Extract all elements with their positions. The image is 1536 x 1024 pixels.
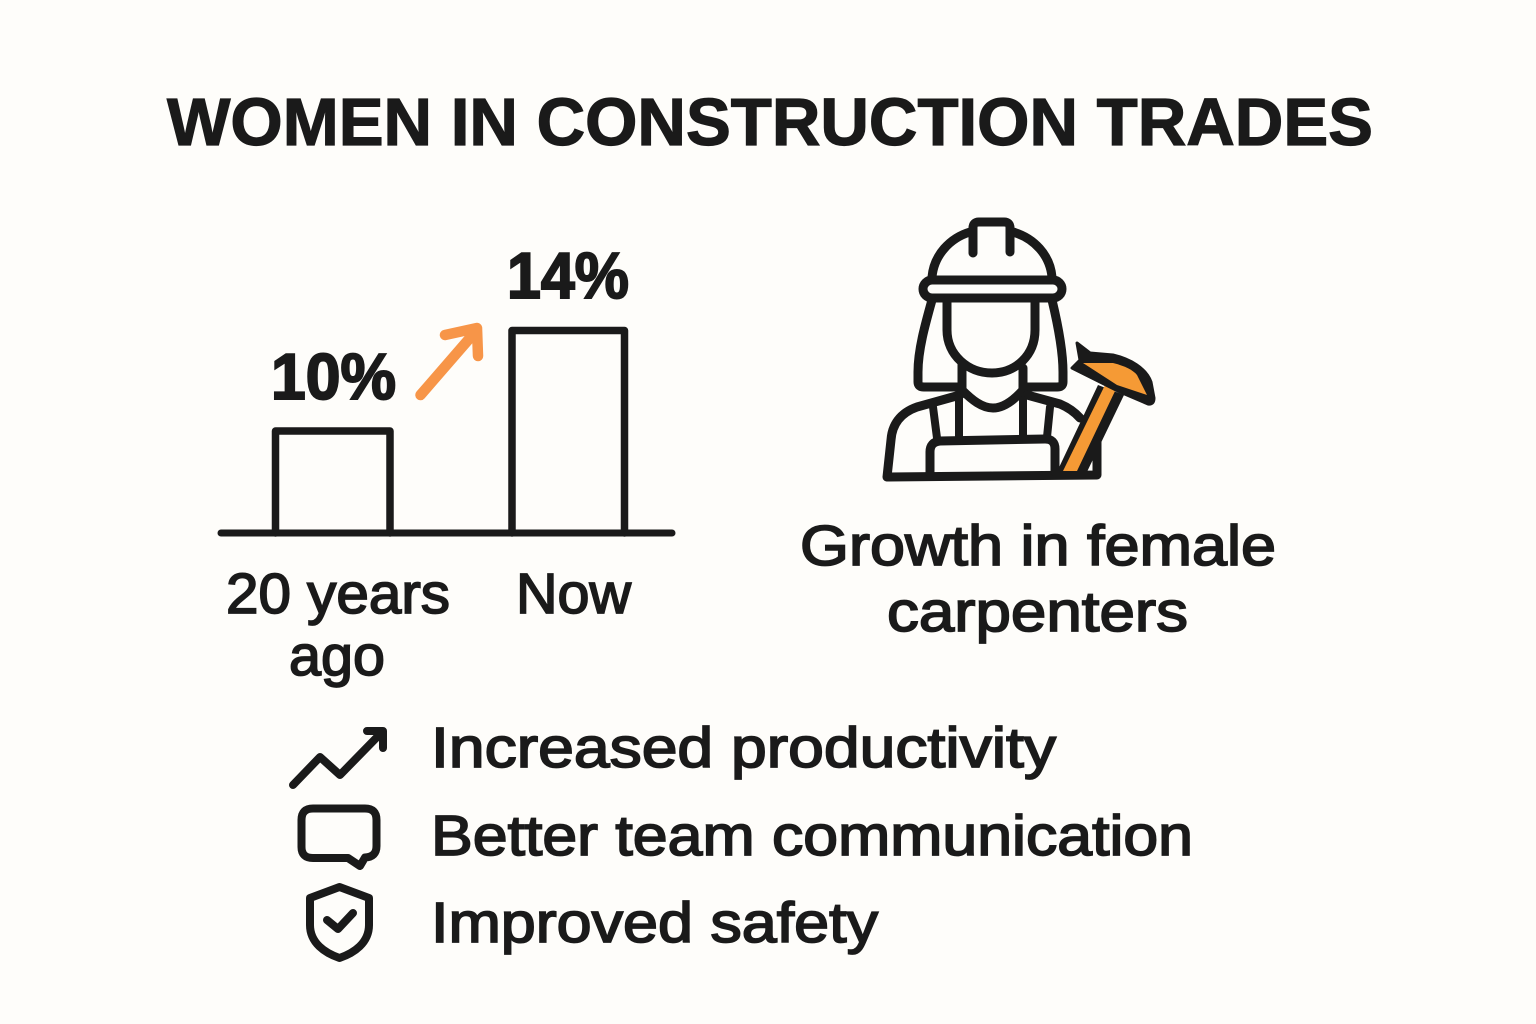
value: 14%: 14% [507, 239, 629, 312]
bar: now [512, 330, 624, 533]
label: 20 years ago [226, 562, 450, 688]
caption: growth in female carpenters [800, 514, 1276, 644]
text: better team communication: Better team communication [431, 804, 1193, 868]
hair [918, 300, 1063, 387]
hammer [1055, 343, 1154, 476]
icon: trend arrow [293, 731, 383, 785]
panel: bar chart [221, 239, 672, 688]
label: 20 years ago: ago [289, 624, 385, 688]
shoulders and body [887, 395, 1097, 477]
icon: shield with check [310, 887, 369, 958]
overall straps [933, 397, 1050, 438]
icon: speech bubble [302, 808, 376, 866]
arrow: growth [420, 328, 478, 395]
value: 10%: 10% [271, 340, 396, 413]
neck and collar [962, 363, 1023, 408]
panel: benefits list [293, 716, 1193, 958]
face [947, 300, 1035, 373]
text: improved safety: Improved safety [431, 891, 879, 955]
label: 20 years ago: 20 years [226, 562, 450, 626]
chart baseline [221, 530, 672, 536]
label: now: Now [516, 562, 632, 626]
bar: 20 years ago [276, 431, 390, 533]
text: increased productivity: Increased productivity [431, 716, 1057, 780]
title: WOMEN IN CONSTRUCTION TRADES [167, 85, 1373, 160]
caption: growth in female carpenters: Growth in female [800, 514, 1276, 578]
caption: growth in female carpenters: carpenters [887, 580, 1188, 644]
icon: female carpenter with hammer [887, 222, 1154, 477]
hard hat [923, 222, 1062, 298]
overall bib [930, 439, 1055, 473]
